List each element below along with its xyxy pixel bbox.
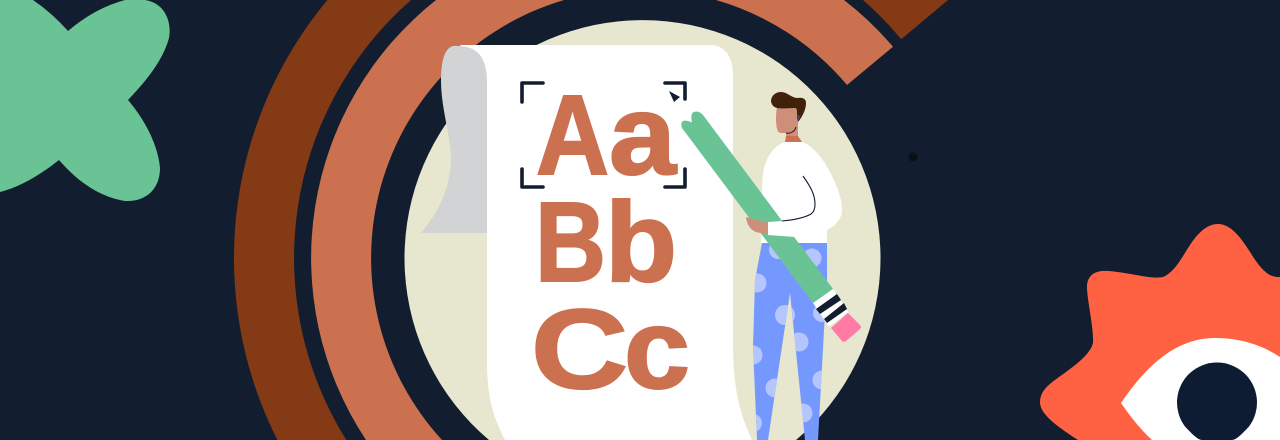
selection brackets (522, 83, 685, 187)
eye white (1121, 338, 1280, 440)
letters Bb (535, 179, 677, 305)
red eye badge (1040, 224, 1280, 440)
ear (797, 116, 799, 119)
torso (761, 142, 842, 243)
letters Cc: c (624, 286, 690, 412)
pencil band (813, 289, 848, 327)
paper scroll (421, 45, 752, 440)
cursor (669, 91, 680, 102)
face and neck skin (776, 107, 798, 137)
letters Aa: a (609, 72, 677, 198)
hand (746, 217, 768, 233)
jaw line (786, 127, 796, 133)
letters Bb: B (535, 179, 606, 305)
neck collar (785, 136, 802, 142)
pants (753, 243, 827, 440)
pencil eraser (831, 313, 861, 342)
hair (771, 92, 806, 122)
white sheet (460, 45, 752, 440)
letters Bb: b (605, 179, 677, 305)
letters Aa (536, 72, 677, 198)
sleeve (768, 205, 827, 237)
letters Aa: A (536, 72, 609, 198)
arm line (782, 176, 815, 221)
black dot (908, 152, 918, 162)
letters Cc (531, 286, 690, 412)
pencil (681, 111, 861, 342)
green blob (0, 0, 170, 201)
pencil stripes (816, 294, 847, 323)
letters Cc: C (531, 286, 628, 412)
orange inner ring (311, 0, 893, 440)
pencil body (681, 111, 833, 303)
cream circle (404, 20, 880, 440)
grey curl (421, 46, 487, 233)
person (744, 92, 842, 440)
eye pupil (1177, 363, 1257, 440)
brown outer ring (234, 0, 948, 440)
